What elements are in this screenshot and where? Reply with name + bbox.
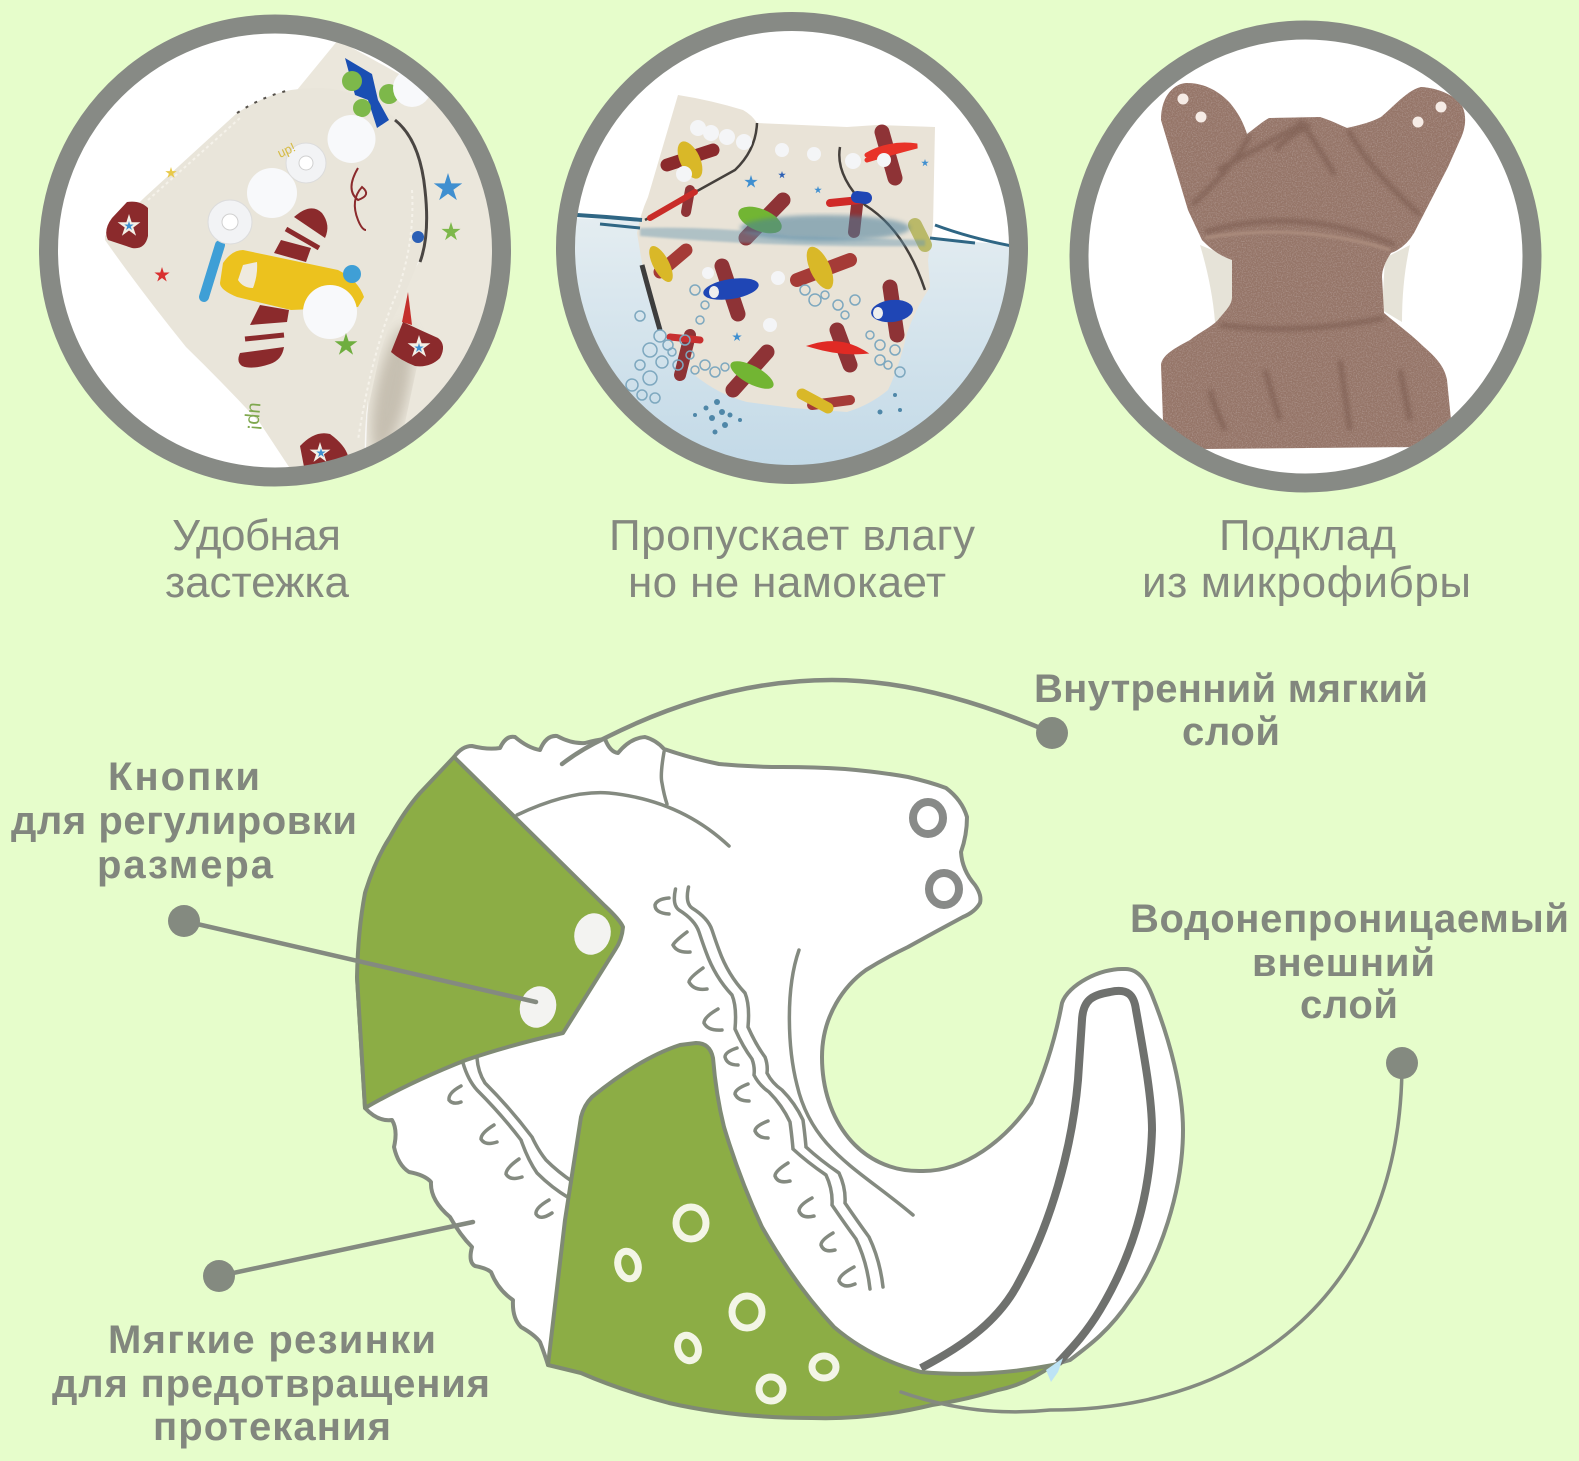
callout line: outer waterproof layer xyxy=(901,1047,1418,1412)
label: size adjustment snaps: Кнопки xyxy=(108,755,260,799)
water splash xyxy=(740,215,910,241)
ring xyxy=(48,24,502,477)
label: inner soft layer: Внутренний мягкий xyxy=(1034,667,1428,711)
photo: diaper in water xyxy=(570,95,1015,470)
blue tip xyxy=(1046,1358,1063,1382)
label: soft elastic: Мягкие резинки xyxy=(108,1318,436,1362)
label: size adjustment snaps xyxy=(11,755,357,887)
label: inner soft layer xyxy=(1034,667,1428,754)
label: soft elastic: протекания xyxy=(153,1405,391,1449)
caption: breathable but waterproof: Пропускает влагу xyxy=(609,511,975,560)
caption: breathable but waterproof: но не намокает xyxy=(628,558,946,607)
stars xyxy=(744,175,758,188)
callout line: inner soft layer xyxy=(562,680,1068,764)
callout line: elastic xyxy=(203,1222,473,1292)
elastic stitch marks xyxy=(449,898,855,1286)
photo: fastener close-up: up! xyxy=(243,402,267,431)
panel: microfiber lining photo xyxy=(1079,30,1532,483)
diagram: diaper illustration xyxy=(357,736,1183,1418)
panel: snap fastener photo xyxy=(48,24,502,477)
caption: convenient fastener: застежка xyxy=(165,558,350,607)
ring xyxy=(566,22,1018,474)
icon: snap rings on tab xyxy=(913,802,959,905)
label: waterproof outer layer: Водонепроницаемый xyxy=(1130,897,1569,941)
panel: waterproof photo xyxy=(566,22,1018,474)
label: size adjustment snaps: для регулировки xyxy=(11,799,357,843)
diaper white silhouette xyxy=(357,736,1183,1405)
photo: fastener close-up: up! xyxy=(275,139,298,161)
callout line: snaps xyxy=(168,905,536,1002)
label: waterproof outer layer: слой xyxy=(1300,983,1398,1027)
caption: convenient fastener: Удобная xyxy=(172,511,341,560)
label: waterproof outer layer: внешний xyxy=(1252,941,1435,985)
photo: microfiber lining xyxy=(1161,83,1465,449)
inner folds xyxy=(463,752,913,1289)
label: waterproof outer layer xyxy=(1130,897,1569,1027)
snap buttons xyxy=(569,908,616,960)
inner dark band xyxy=(921,991,1152,1368)
caption: convenient fastener xyxy=(165,511,350,607)
label: soft elastic xyxy=(52,1318,490,1449)
printed planes xyxy=(645,132,925,408)
ring xyxy=(1079,30,1532,483)
caption: breathable but waterproof xyxy=(609,511,975,607)
caption: microfiber lining: Подклад xyxy=(1219,511,1396,560)
label: size adjustment snaps: размера xyxy=(97,843,274,887)
snap rings on panel xyxy=(615,1207,836,1401)
panel: green front panel xyxy=(548,1043,1053,1418)
panel: green waist flap xyxy=(357,757,623,1108)
label: soft elastic: для предотвращения xyxy=(52,1362,490,1406)
label: inner soft layer: слой xyxy=(1182,710,1280,754)
caption: microfiber lining: из микрофибры xyxy=(1142,558,1471,607)
caption: microfiber lining xyxy=(1142,511,1471,607)
photo: fastener close-up xyxy=(105,40,500,475)
